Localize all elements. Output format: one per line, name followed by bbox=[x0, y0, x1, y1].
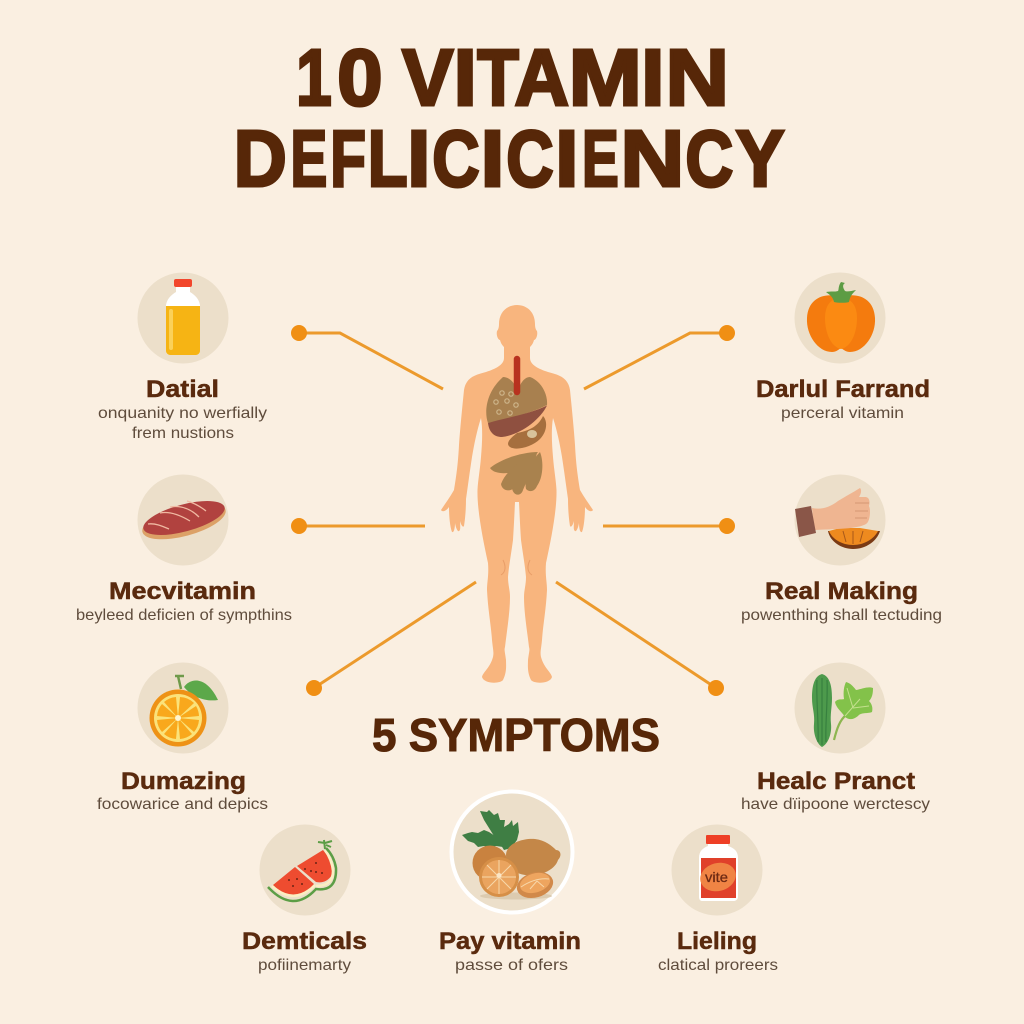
heading: Real Making bbox=[765, 578, 918, 605]
panel: bottom center bbox=[439, 792, 581, 974]
title: 1 bbox=[296, 33, 332, 122]
title: A bbox=[514, 33, 569, 122]
icon: fruit and leaves bbox=[452, 792, 572, 912]
description: frem nustions bbox=[132, 425, 234, 442]
knee creases bbox=[501, 560, 532, 575]
title: 0 bbox=[337, 33, 383, 122]
panel: middle left bbox=[76, 474, 292, 624]
title: L bbox=[368, 114, 408, 203]
description: perceral vitamin bbox=[781, 405, 904, 422]
heading: Mecvitamin bbox=[109, 578, 256, 605]
panel: bottom right bbox=[658, 824, 778, 974]
heading: Darlul Farrand bbox=[756, 376, 930, 403]
icon: vitamin bottle bbox=[672, 824, 762, 916]
icon: meat bbox=[138, 474, 229, 566]
title: T bbox=[477, 33, 519, 122]
title: E bbox=[582, 114, 619, 203]
title: I bbox=[480, 114, 504, 203]
heading: Pay vitamin bbox=[439, 928, 581, 955]
title: M bbox=[569, 33, 642, 122]
liver bbox=[488, 406, 547, 437]
icon: watermelon bbox=[260, 824, 350, 916]
title: D bbox=[234, 114, 287, 203]
description: passe of ofers bbox=[455, 957, 568, 974]
title: C bbox=[432, 114, 480, 203]
icon: orange pepper bbox=[794, 272, 886, 364]
icon: hand with orange slice bbox=[794, 474, 886, 566]
description bbox=[98, 405, 267, 442]
human body figure bbox=[441, 305, 593, 683]
intestines bbox=[490, 452, 542, 495]
lung texture bbox=[494, 391, 518, 415]
title: E bbox=[290, 114, 327, 203]
heading: Lieling bbox=[677, 928, 757, 955]
title: V bbox=[402, 33, 453, 122]
icon: vitamin bottle: vite bbox=[705, 869, 728, 885]
stomach bbox=[508, 416, 546, 449]
lungs bbox=[486, 377, 547, 423]
panel: top right bbox=[756, 272, 930, 422]
description: clatical proreers bbox=[658, 957, 778, 974]
title: N bbox=[666, 33, 729, 122]
title: I bbox=[454, 33, 477, 122]
title bbox=[234, 33, 785, 203]
description: pofiinemarty bbox=[258, 957, 351, 974]
panel: bottom left bbox=[242, 824, 367, 974]
description: powenthing shall tectuding bbox=[741, 607, 942, 624]
panel: lower left bbox=[97, 662, 268, 813]
title: I bbox=[407, 114, 431, 203]
icon: cucumber and leaf bbox=[794, 662, 886, 754]
panel: lower right bbox=[741, 662, 930, 813]
title: I bbox=[641, 33, 664, 122]
heading: Demticals bbox=[242, 928, 367, 955]
heading: Dumazing bbox=[121, 768, 246, 795]
icon: yellow bottle bbox=[138, 272, 228, 364]
title: I bbox=[555, 114, 579, 203]
icon: orange bbox=[138, 662, 228, 754]
description: beyleed deficien of sympthins bbox=[76, 607, 292, 624]
title: N bbox=[620, 114, 684, 203]
description: onquanity no werfially bbox=[98, 405, 267, 422]
description: focowarice and depics bbox=[97, 796, 268, 813]
description: have dïipoone werctescy bbox=[741, 796, 930, 813]
title: C bbox=[685, 114, 733, 203]
body silhouette bbox=[441, 305, 593, 683]
panel: top left bbox=[98, 272, 267, 442]
heading: Datial bbox=[146, 376, 219, 403]
panel: middle right bbox=[741, 474, 942, 624]
connector lines bbox=[291, 325, 735, 696]
windpipe bbox=[514, 359, 520, 392]
section heading: 5 SYMPTOMS bbox=[372, 709, 660, 761]
title: F bbox=[330, 114, 366, 203]
title: Y bbox=[736, 114, 784, 203]
heading: Healc Pranct bbox=[757, 768, 915, 795]
title: C bbox=[506, 114, 554, 203]
